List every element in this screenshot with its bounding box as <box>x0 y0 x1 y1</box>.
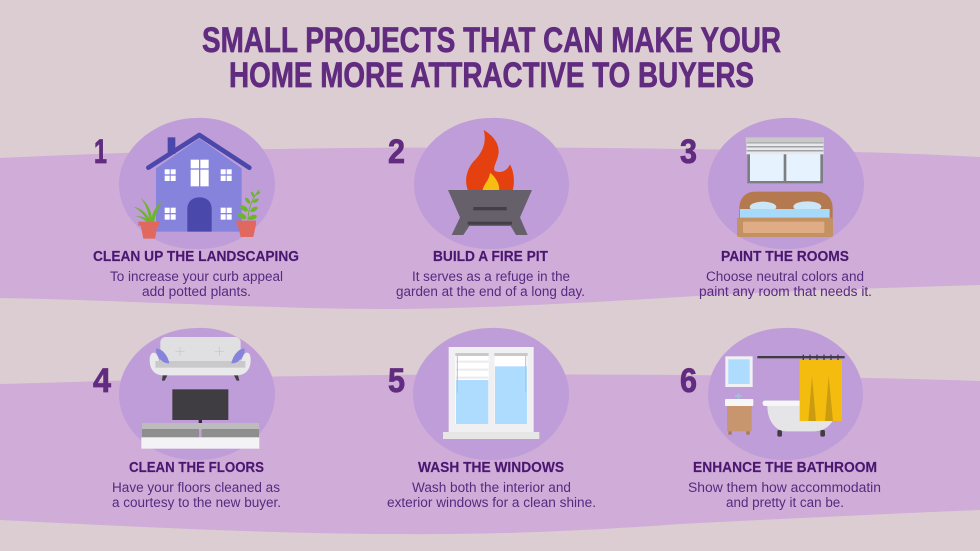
description <box>110 269 283 299</box>
icon: window with blinds <box>413 328 569 460</box>
description: paint any room that needs it. <box>699 284 872 299</box>
description <box>688 480 881 510</box>
description: Have your floors cleaned as <box>112 480 280 495</box>
heading: CLEAN UP THE LANDSCAPING <box>93 249 299 265</box>
number 2: 2 <box>388 133 405 171</box>
description: To increase your curb appeal <box>110 269 283 284</box>
description <box>387 480 596 510</box>
description <box>112 480 281 510</box>
description: a courtesy to the new buyer. <box>112 495 281 510</box>
description: add potted plants. <box>142 284 251 299</box>
number 1: 1 <box>94 133 107 171</box>
heading: BUILD A FIRE PIT <box>433 249 548 265</box>
panel: enhance the bathroom <box>680 328 881 510</box>
title <box>202 21 781 95</box>
heading: ENHANCE THE BATHROOM <box>693 460 877 476</box>
description: Wash both the interior and <box>412 480 571 495</box>
icon: sofa and television <box>119 328 275 460</box>
icon: fire pit <box>414 118 569 249</box>
description: garden at the end of a long day. <box>396 284 585 299</box>
description: exterior windows for a clean shine. <box>387 495 596 510</box>
description: and pretty it can be. <box>726 495 844 510</box>
heading: WASH THE WINDOWS <box>418 460 564 476</box>
title: HOME MORE ATTRACTIVE TO BUYERS <box>229 56 754 95</box>
description: Show them how accommodatin <box>688 480 881 495</box>
description <box>396 269 585 299</box>
heading: PAINT THE ROOMS <box>721 249 849 265</box>
description <box>699 269 872 299</box>
panel: paint the rooms <box>680 118 872 299</box>
number 4: 4 <box>93 362 111 400</box>
icon: bathroom <box>708 328 863 460</box>
icon: house with potted plants <box>119 118 275 249</box>
icon: window and bed <box>708 118 864 249</box>
panel: clean up the landscaping <box>93 118 299 299</box>
panel: wash the windows <box>387 328 596 510</box>
number 6: 6 <box>680 362 697 400</box>
number 5: 5 <box>388 362 405 400</box>
panel: build a fire pit <box>388 118 585 299</box>
description: It serves as a refuge in the <box>412 269 570 284</box>
heading: CLEAN THE FLOORS <box>129 460 264 476</box>
panel: clean the floors <box>93 328 281 510</box>
description: Choose neutral colors and <box>706 269 864 284</box>
number 3: 3 <box>680 133 697 171</box>
title: SMALL PROJECTS THAT CAN MAKE YOUR <box>202 21 781 60</box>
